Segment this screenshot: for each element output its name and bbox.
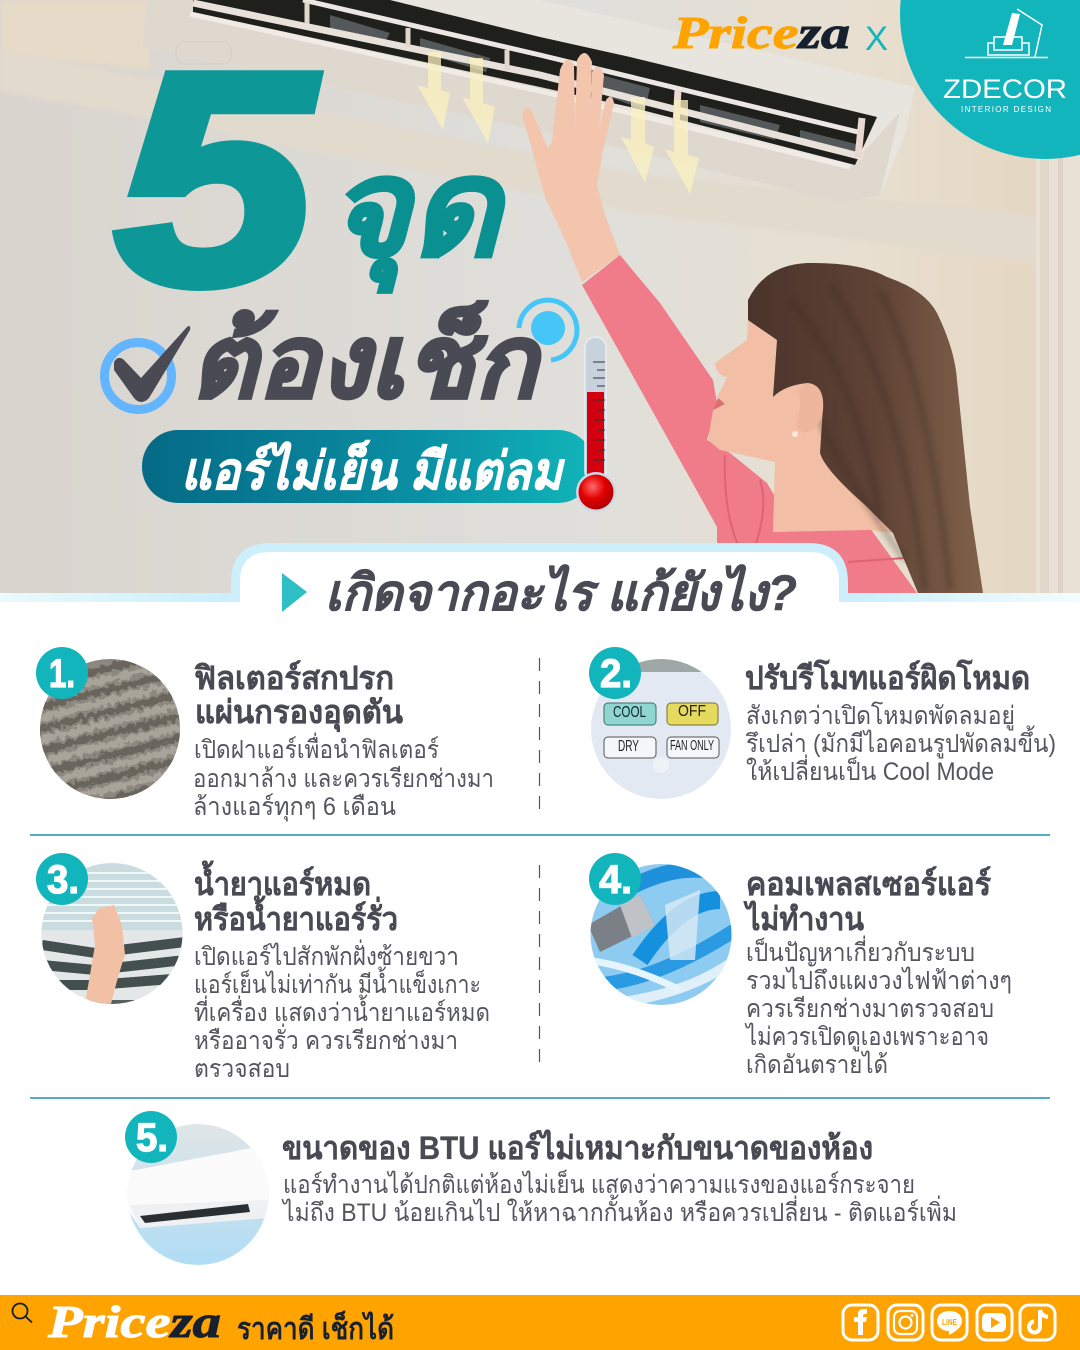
social icons <box>843 1305 1055 1340</box>
text: point 4: รวมไปถึงแผงวงไฟฟ้าต่างๆ <box>746 966 1012 995</box>
title: number 5: 5 <box>115 10 321 347</box>
photo: white air conditioner <box>128 1124 268 1265</box>
text: point 3: ตรวจสอบ <box>194 1055 290 1083</box>
text: point 5: แอร์ทำงานได้ปกติแต่ห้องไม่เย็น แสดงว่าความแรงของแอร์กระจาย <box>283 1169 915 1199</box>
photo: remote buttons: COOL <box>613 704 646 721</box>
logo: ZDECOR badge <box>900 0 1080 159</box>
text: point 3: หรือน้ำยาแอร์รั่ว <box>194 895 398 937</box>
footer logo Priceza: Price za <box>47 1296 221 1347</box>
text: point 1: ออกมาล้าง และควรเรียกช่างมา <box>193 765 494 793</box>
text: point 1: เปิดฝาแอร์เพื่อนำฟิลเตอร์ <box>194 732 439 764</box>
text: point 3 <box>194 860 490 1083</box>
text: point 1: ล้างแอร์ทุกๆ 6 เดือน <box>193 793 396 822</box>
icon: blue signal dot <box>519 300 577 360</box>
badge 5 <box>125 1111 177 1163</box>
text: point 2: สังเกตว่าเปิดโหมดพัดลมอยู่ <box>746 701 1015 731</box>
icon: search <box>12 1304 32 1322</box>
icons: cool air arrows <box>417 52 699 194</box>
woman <box>522 53 983 593</box>
icon: thermometer <box>576 337 616 512</box>
text: point 4 <box>743 866 1012 1079</box>
badge 3: 3. <box>47 858 79 902</box>
badge 3 <box>36 853 88 905</box>
title: จุด: จุด <box>328 132 507 293</box>
text: point 1 <box>193 660 494 822</box>
text: point 3: หรืออาจรั่ว ควรเรียกช่างมา <box>194 1023 458 1055</box>
photo: remote buttons: OFF <box>678 703 706 720</box>
text: point 3: น้ำยาแอร์หมด <box>194 860 371 902</box>
hero photo: woman checking air conditioner <box>0 0 1080 593</box>
panel: point 3 refrigerant <box>36 853 490 1083</box>
badge 1 <box>36 647 88 699</box>
text: point 2: ให้เปลี่ยนเป็น Cool Mode <box>746 754 994 786</box>
row divider 1 <box>30 834 1050 836</box>
logo: ZDECOR badge: ZDECOR <box>943 74 1067 104</box>
photo: dusty filter <box>40 659 180 799</box>
row divider 2 <box>30 1097 1050 1099</box>
panel: point 5 BTU size <box>125 1111 957 1270</box>
photo: open air conditioner <box>40 860 185 1010</box>
text: point 5 <box>281 1129 957 1227</box>
text: point 2: รึเปล่า (มักมีไอคอนรูปพัดลมขึ้น) <box>745 725 1056 759</box>
subtitle pill: แอร์ไม่เย็น มีแต่ลม <box>181 440 565 501</box>
badge 4 <box>589 853 641 905</box>
footer tagline: ราคาดี เช็กได้ <box>237 1310 394 1346</box>
text: point 3: เปิดแอร์ไปสักพักฝั่งซ้ายขวา <box>194 939 459 971</box>
panel: point 1 dirty filter <box>20 645 494 822</box>
logo: ZDECOR badge: INTERIOR DESIGN <box>961 105 1051 114</box>
text: point 1: ฟิลเตอร์สกปรก <box>194 660 394 696</box>
badge 5: 5. <box>136 1116 168 1160</box>
text: point 4: เกิดอันตรายได้ <box>746 1050 888 1079</box>
panel: point 4 compressor <box>585 853 1012 1079</box>
text: point 4: คอมเพลสเซอร์แอร์ <box>746 866 991 902</box>
photo: compressor rotors <box>590 864 732 1005</box>
text: point 1: แผ่นกรองอุดตัน <box>195 694 403 733</box>
photo: remote buttons: DRY <box>618 738 639 755</box>
title: ต้องเช็ก: ต้องเช็ก <box>190 301 542 419</box>
badge 1: 1. <box>49 652 75 696</box>
text: point 4: ควรเรียกช่างมาตรวจสอบ <box>746 995 994 1023</box>
badge 2: 2. <box>600 652 632 696</box>
text: point 4: เป็นปัญหาเกี่ยวกับระบบ <box>746 935 975 967</box>
panel: point 2 wrong mode <box>589 647 1056 805</box>
section heading tab: เกิดจากอะไร แก้ยังไง? <box>325 564 797 621</box>
text: point 2 <box>745 659 1056 786</box>
text: point 3: ที่เครื่อง แสดงว่าน้ำยาแอร์หมด <box>194 994 490 1027</box>
badge 4: 4. <box>599 858 632 902</box>
social icons: LINE <box>942 1318 958 1327</box>
text: point 5: ขนาดของ BTU แอร์ไม่เหมาะกับขนาดของห้อง <box>282 1129 873 1166</box>
logo: Priceza: Price za <box>672 7 850 58</box>
text: point 3: แอร์เย็นไม่เท่ากัน มีน้ำแข็งเกาะ <box>194 966 481 999</box>
photo: remote buttons <box>590 655 735 805</box>
text: point 4: ไม่ควรเปิดดูเองเพราะอาจ <box>744 1022 989 1052</box>
text: point 2: ปรับรีโมทแอร์ผิดโหมด <box>745 659 1030 696</box>
text: point 5: ไม่ถึง BTU น้อยเกินไป ให้หาฉากกั้นห้อง หรือควรเปลี่ยน - ติดแอร์เพิ่ม <box>281 1194 957 1227</box>
air conditioner unit <box>142 0 915 203</box>
x separator: X <box>865 20 888 58</box>
icon: checkmark <box>104 326 190 410</box>
footer bar <box>0 1295 1080 1350</box>
column dividers <box>538 658 540 1066</box>
text: point 4: ไม่ทำงาน <box>743 900 864 937</box>
badge 2 <box>589 647 641 699</box>
photo: remote buttons: FAN ONLY <box>670 737 714 754</box>
section heading tab <box>0 543 1080 621</box>
